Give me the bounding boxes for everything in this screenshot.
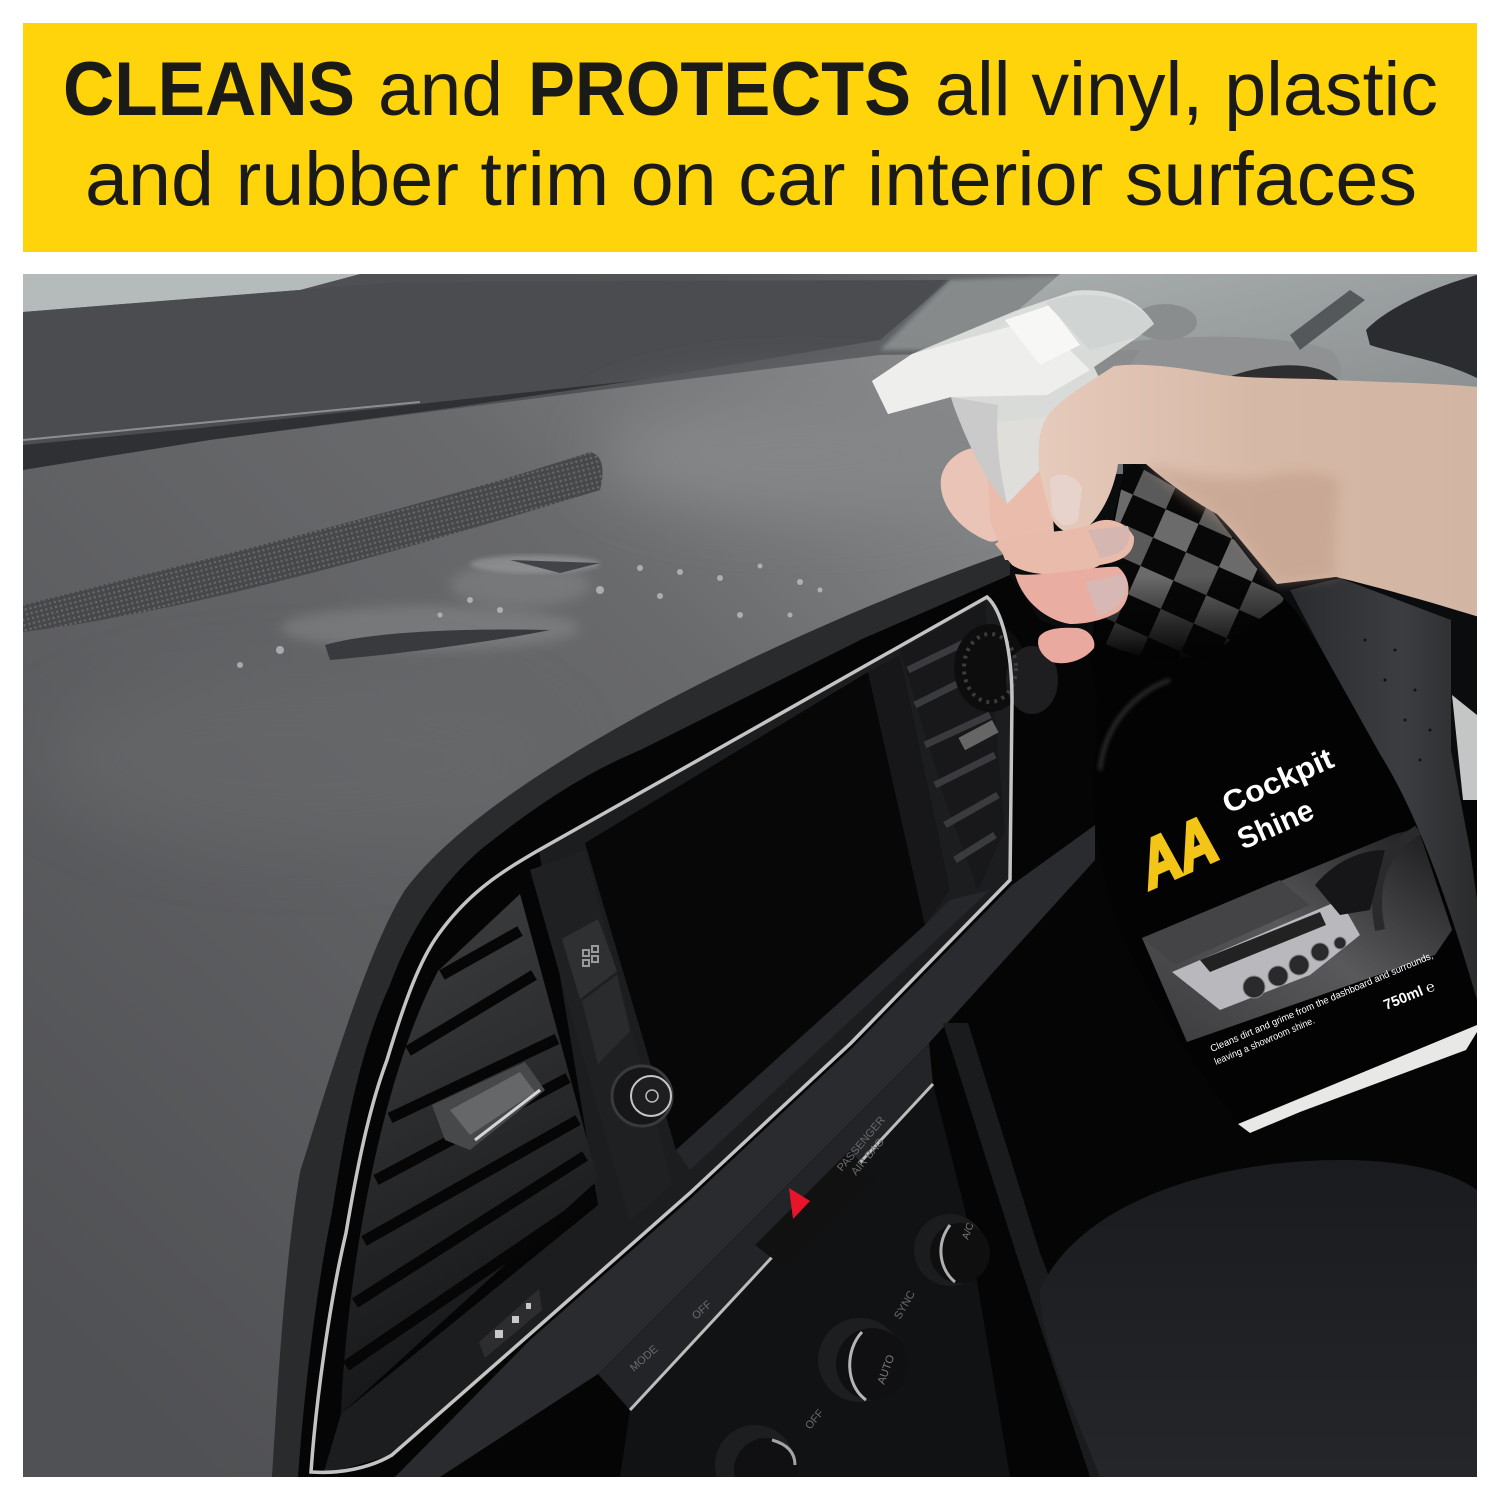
headline line 1: PROTECTS [528,47,911,132]
upper right cabin [1018,274,1477,387]
passenger leg [1040,1160,1477,1477]
hand shading [1050,464,1340,584]
steering column [943,1023,1100,1477]
button labels: PASSENGER [835,1114,888,1174]
label description text: leaving a showroom shine. [1213,1015,1317,1068]
label description text: Cleans dirt and grime from the dashboard and surrounds, [1209,950,1435,1055]
bottle shoulder highlight [1100,680,1170,770]
button labels: OFF [803,1407,827,1432]
climate knob centre: AUTO [876,1353,897,1386]
climate knob right [914,1214,990,1286]
vent adjuster tab [432,1062,545,1150]
car interior photo panel [23,274,1479,1500]
hand: gripping fingers [995,520,1134,663]
hand: palm and wrist [1039,365,1479,617]
button labels: OFF [690,1298,715,1322]
bottle body [1092,478,1477,1026]
headline line 2: and rubber trim on car interior surfaces [85,137,1417,222]
power knob [612,1066,672,1126]
trim inner panel [323,597,1012,1475]
headline line 1: CLEANS [63,47,355,132]
product name: Shine [1232,794,1319,856]
infotainment screen [585,672,925,1150]
button labels [628,1114,918,1432]
hand: fingers behind trigger [941,417,1056,560]
white bottle base [1238,1025,1477,1133]
headline line 1: all vinyl, plastic [935,47,1438,132]
button labels: AIR BAG [849,1136,887,1178]
windscreen area [23,274,1123,474]
yellow headline banner [23,23,1477,252]
right air vent [906,640,1000,863]
vent dial knob [954,624,1058,714]
volume mark: 750ml ℮ [1382,979,1437,1014]
dashboard shading [40,400,1000,850]
product name: Cockpit [1217,742,1339,820]
headline line 1 [63,47,1438,132]
steering wheel [1290,578,1477,1030]
black gloss trim surround [298,575,1477,1477]
chequered flag pattern [1105,470,1284,652]
button labels: SYNC [892,1289,918,1322]
vent thumb wheel [479,1289,542,1358]
climate console panel [598,1043,1010,1477]
lower console strip [395,825,1095,1477]
spray bottle [1090,464,1477,1133]
spray trigger head [872,290,1154,504]
screen lower bezel [676,890,990,1170]
water droplets on dashboard [237,555,822,668]
AA logo: AA [1136,800,1222,905]
headline line 1: and [378,47,503,132]
hazard triangle [789,1188,810,1219]
climate knob centre [818,1318,894,1402]
chrome trim loop [311,597,1012,1472]
dashboard dark rim [272,552,1010,1477]
climate knob lower [715,1425,796,1477]
label dashboard image [1142,828,1452,1042]
climate knob right: A/C [960,1222,977,1241]
product name [1224,750,1336,848]
button labels: MODE [628,1343,661,1374]
centre control column [530,866,630,1064]
speaker grille [23,452,603,632]
left air vent [341,894,598,1414]
dashboard top surface [23,354,1003,1477]
